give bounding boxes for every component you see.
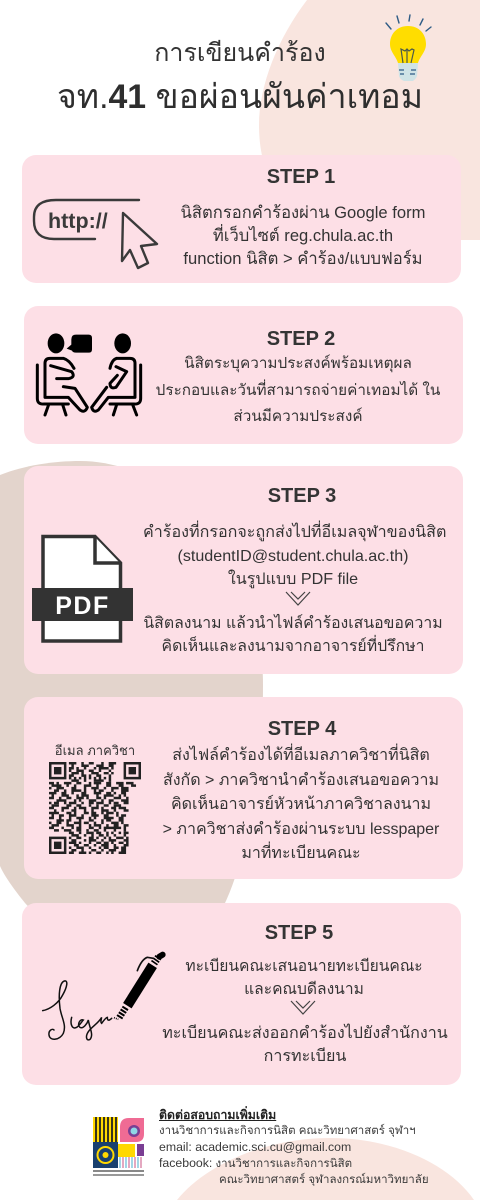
- step 2 text: นิสิตระบุความประสงค์พร้อมเหตุผล: [184, 355, 412, 372]
- step 3 text upper: [143, 520, 446, 588]
- title line 2: จท.41 ขอผ่อนผันค่าเทอม: [57, 78, 423, 116]
- step 2 text: [156, 354, 440, 425]
- panel: step 5: [22, 903, 461, 1085]
- panel: step 1: [22, 155, 461, 283]
- step 5 text lower: [162, 1024, 448, 1065]
- step 3 heading: STEP 3: [268, 485, 336, 507]
- step 2 heading: STEP 2: [267, 328, 335, 350]
- step 3 text lower: นิสิตลงนาม แล้วนำไฟล์คำร้องเสนอขอความ: [143, 615, 443, 632]
- step 2 text: ส่วนมีความประสงค์: [233, 408, 363, 425]
- step 4 text: ส่งไฟล์คำร้องได้ที่อีเมลภาควิชาที่นิสิต: [172, 747, 430, 764]
- qr label: อีเมล ภาควิชา: [55, 743, 135, 758]
- qr code: [49, 762, 141, 854]
- step 4 text: [163, 744, 440, 862]
- icon: http cursor: http://: [48, 209, 108, 233]
- step 5 text lower: การทะเบียน: [264, 1047, 346, 1065]
- arrow: chevron down: [286, 592, 310, 606]
- step 5 text upper: และคณบดีลงนาม: [244, 981, 364, 998]
- icon: light bulb: [385, 14, 432, 81]
- step 5 text lower: ทะเบียนคณะส่งออกคำร้องไปยังสำนักงาน: [162, 1024, 448, 1042]
- contact text: email: academic.sci.cu@gmail.com: [159, 1140, 351, 1154]
- logo: [93, 1117, 144, 1176]
- step 1 text: นิสิตกรอกคำร้องผ่าน Google form: [181, 203, 425, 222]
- title line 1: การเขียนคำร้อง: [154, 39, 326, 67]
- contact text: งานวิชาการและกิจการนิสิต คณะวิทยาศาสตร์ จุฬาฯ: [159, 1125, 416, 1137]
- contact text: [159, 1106, 429, 1186]
- step 5 heading: STEP 5: [265, 922, 333, 944]
- contact text: ติดต่อสอบถามเพิ่มเติม: [159, 1108, 276, 1122]
- step 4 text: > ภาควิชาส่งคำร้องผ่านระบบ lesspaper: [163, 821, 439, 838]
- step 5 text upper: [185, 958, 423, 998]
- contact text: facebook: งานวิชาการและกิจการนิสิต: [159, 1156, 352, 1170]
- text: คณะวิทยาศาสตร์ จุฬาลงกรณ์มหาวิทยาลัย: [219, 1174, 429, 1186]
- step 3 text upper: (studentID@student.chula.ac.th): [177, 546, 409, 564]
- icon: http cursor: [32, 198, 158, 270]
- step 3 text lower: [143, 614, 443, 655]
- panel: step 4: [24, 697, 463, 879]
- icon: two people talking: [36, 333, 142, 416]
- step 1 text: function นิสิต > คำร้อง/แบบฟอร์ม: [183, 249, 423, 268]
- step 1 text: ที่เว็บไซต์ reg.chula.ac.th: [213, 226, 393, 245]
- step 4 text: สังกัด > ภาควิชานำคำร้องเสนอขอความ: [163, 772, 439, 789]
- panel: step 3: [24, 466, 463, 674]
- step 1 heading: STEP 1: [267, 166, 335, 188]
- arrow: chevron down: [290, 1000, 316, 1015]
- icon: pdf file: PDF: [55, 592, 110, 620]
- step 3 text upper: คำร้องที่กรอกจะถูกส่งไปที่อีเมลจุฬาของนิสิต: [143, 523, 446, 541]
- step 5 text upper: ทะเบียนคณะเสนอนายทะเบียนคณะ: [185, 958, 423, 975]
- panel: step 2: [24, 306, 463, 444]
- step 3 text lower: คิดเห็นและลงนามจากอาจารย์ที่ปรึกษา: [162, 638, 424, 655]
- icon: pdf file: [32, 534, 133, 643]
- step 2 text: ประกอบและวันที่สามารถจ่ายค่าเทอมได้ ใน: [156, 382, 440, 398]
- step 4 text: มาที่ทะเบียนคณะ: [241, 845, 361, 862]
- step 4 heading: STEP 4: [268, 718, 336, 740]
- icon: signature and pen: [42, 952, 166, 1041]
- step 1 text: [181, 203, 425, 268]
- title: [57, 39, 423, 116]
- step 3 text upper: ในรูปแบบ PDF file: [228, 570, 358, 588]
- step 4 text: คิดเห็นอาจารย์หัวหน้าภาควิชาลงนาม: [171, 796, 431, 813]
